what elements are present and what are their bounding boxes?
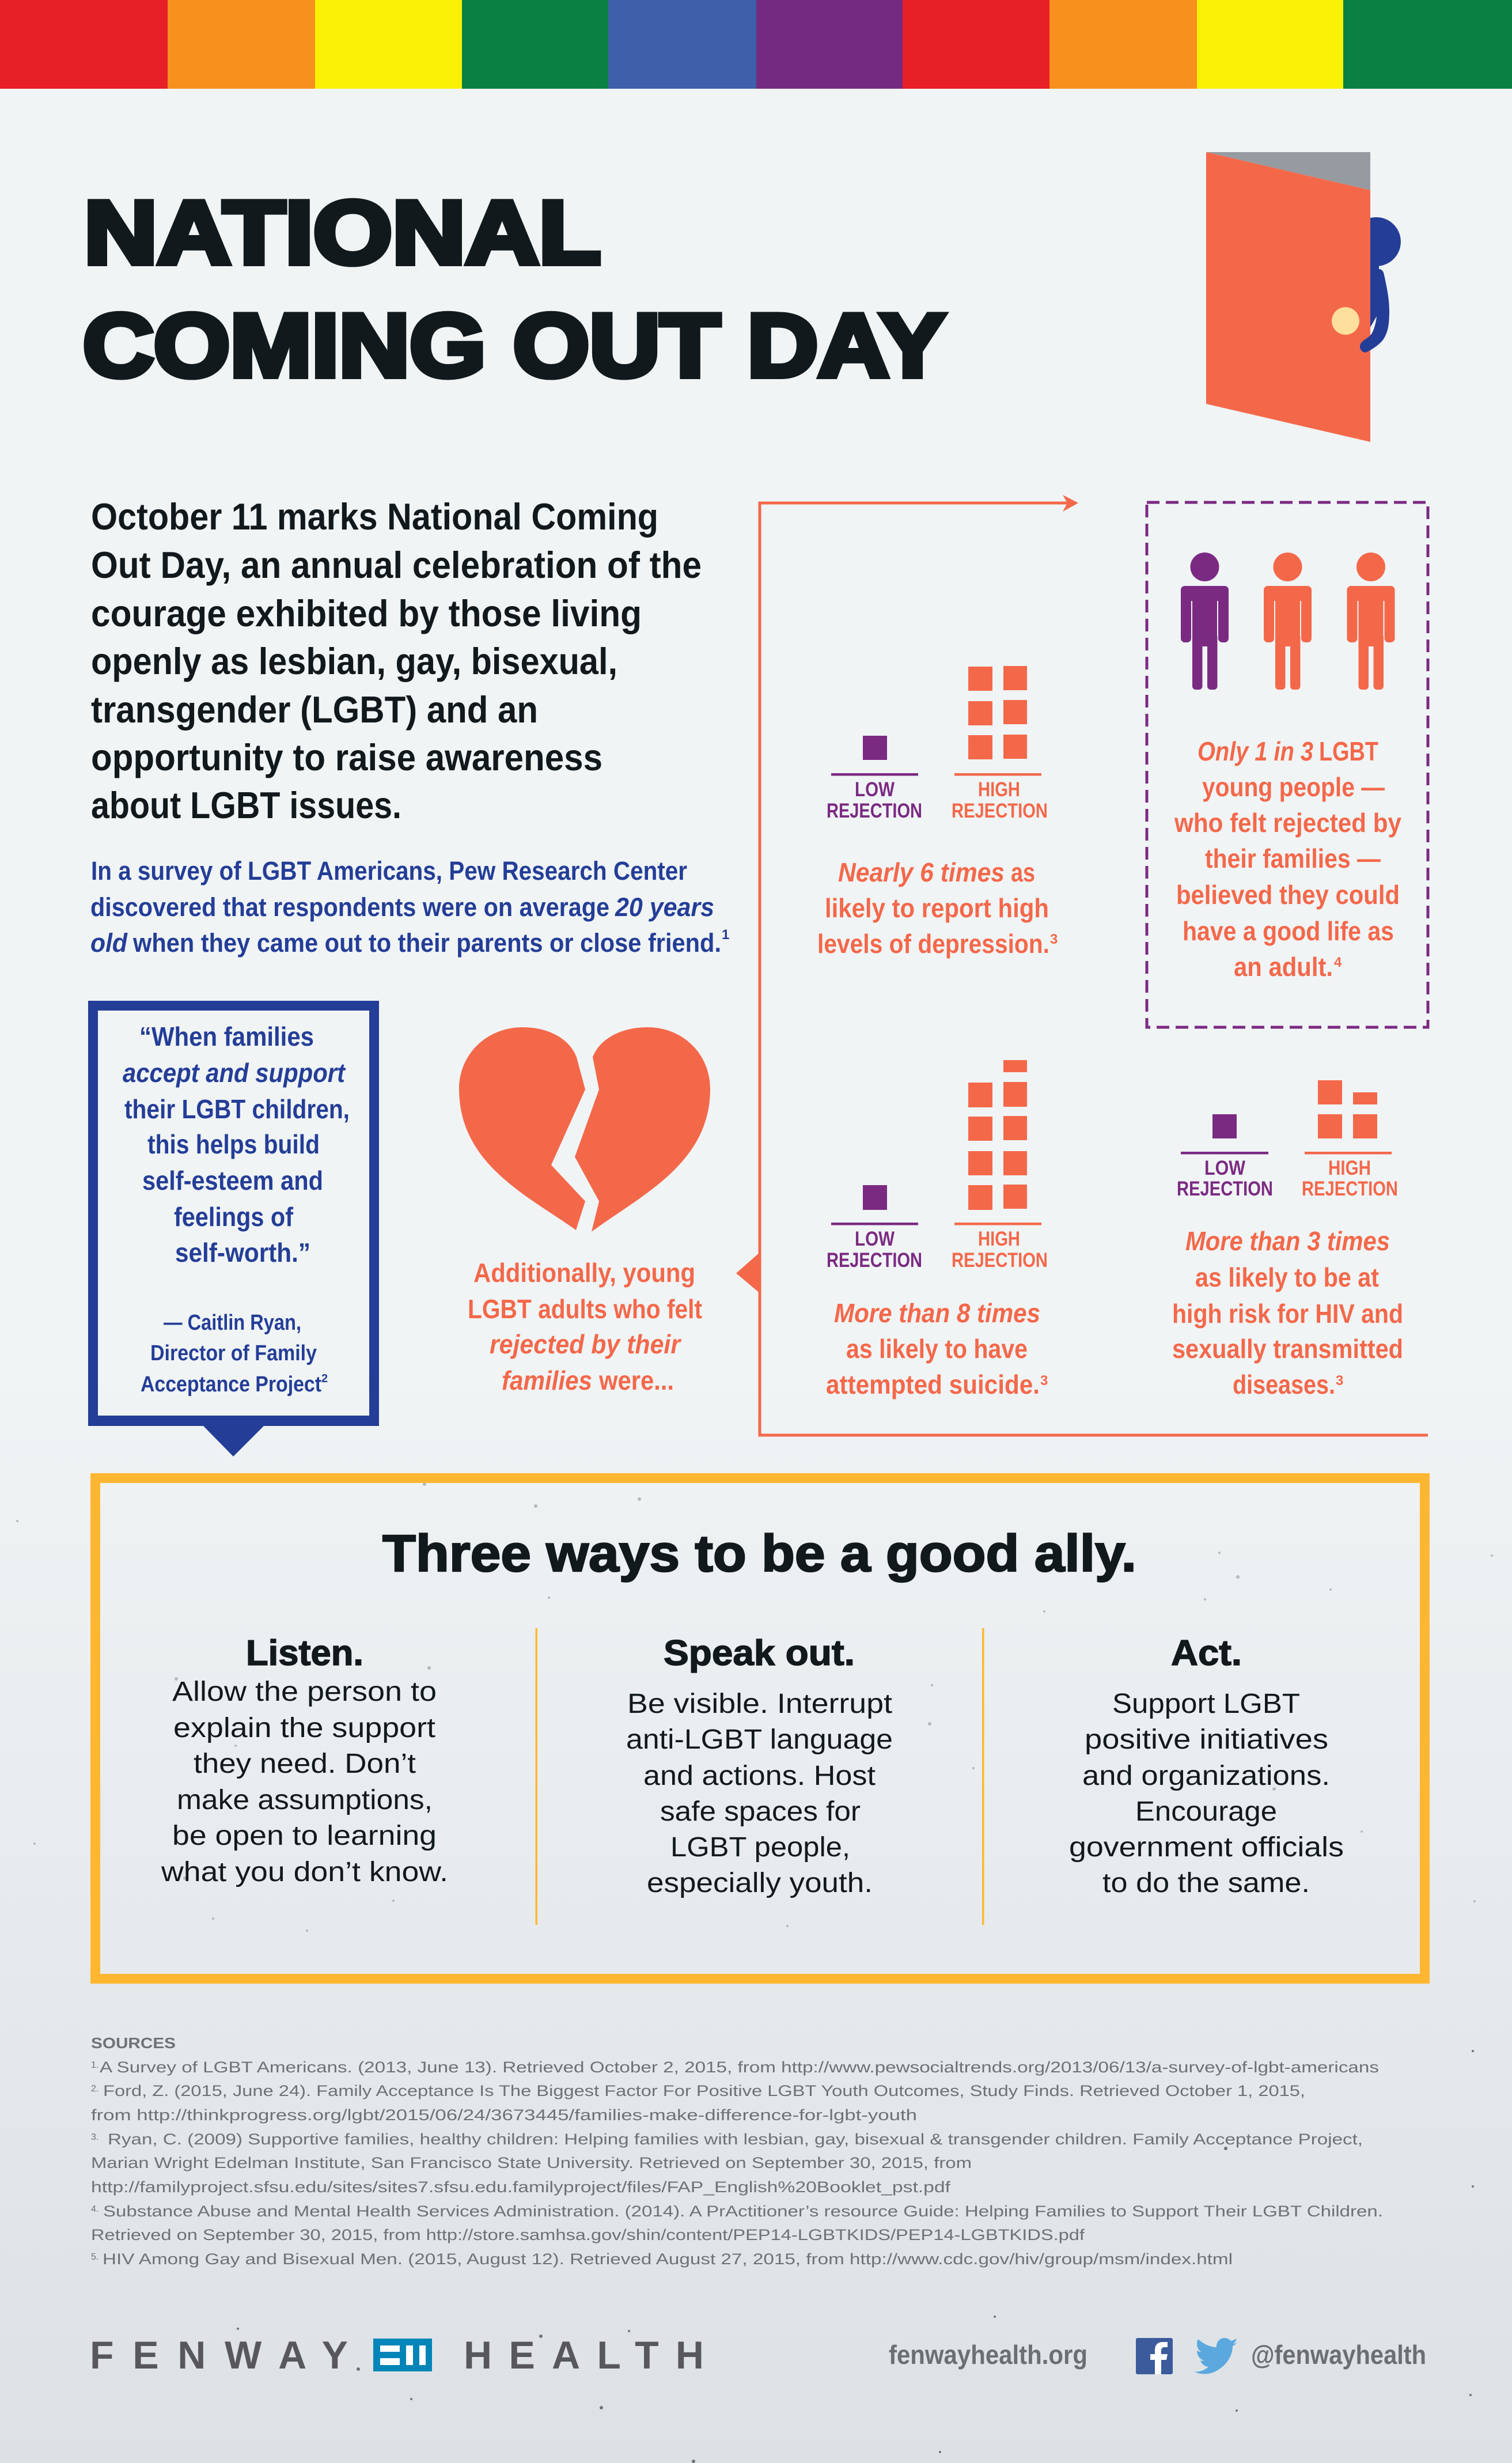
quote text: “When families: [139, 1021, 314, 1051]
quote attribution: — Caitlin Ryan,: [164, 1311, 301, 1335]
low rejection bar: REJECTION: [827, 1249, 922, 1272]
survey text block: old: [90, 928, 128, 958]
caption: as likely to have: [846, 1334, 1028, 1364]
text: rejected by their families: families: [502, 1365, 592, 1395]
column: speak out: [626, 1633, 893, 1898]
intro paragraph: openly as lesbian, gay, bisexual,: [91, 640, 617, 682]
caption: sexually transmitted: [1172, 1334, 1403, 1364]
caption: high risk for HIV and: [1172, 1299, 1403, 1329]
logo: Fenway Health: HEALTH: [464, 2333, 704, 2377]
speech bubble frame: [88, 1001, 379, 1456]
icon: person peeking from behind open door: [1206, 152, 1401, 442]
sources list: 3.: [91, 2132, 98, 2142]
column: speak out: Speak out.: [664, 1633, 855, 1673]
quote attribution: [141, 1311, 328, 1397]
text: rejected by their families: LGBT adults who felt: [468, 1294, 702, 1324]
intro paragraph: [91, 495, 702, 826]
caption: 3: [1040, 1373, 1048, 1388]
title: NATIONAL: [84, 183, 601, 282]
column: listen: explain the support: [173, 1713, 435, 1743]
person arm: [1360, 265, 1389, 353]
column: act: [1069, 1633, 1344, 1898]
door knob: [1332, 307, 1359, 335]
sources list: Retrieved on September 30, 2015, from http://store.samhsa.gov/shin/content/PEP14-LGBTKIDS/PEP14-LGBTKIDS.pdf: [91, 2226, 1085, 2243]
icon: broken heart: [459, 1027, 710, 1232]
caption: [817, 857, 1058, 959]
quote text: accept and support: [123, 1058, 346, 1088]
caption: Nearly 6 times: [838, 857, 1005, 887]
caption: LGBT: [1319, 736, 1378, 766]
column: listen: Listen.: [246, 1633, 363, 1673]
quote text: this helps build: [147, 1129, 320, 1159]
sources list: 5.: [91, 2252, 98, 2262]
chart: depression, low vs high rejection: [817, 666, 1058, 959]
survey text block: In a survey of LGBT Americans, Pew Research Center: [91, 856, 687, 886]
intro paragraph: October 11 marks National Coming: [91, 495, 658, 538]
column: speak out: safe spaces for: [660, 1796, 861, 1827]
text: rejected by their families: Additionally, young: [473, 1258, 695, 1288]
sources list: 4.: [91, 2204, 98, 2214]
icon: Facebook: [1136, 2338, 1173, 2374]
quote text: self-esteem and: [142, 1166, 323, 1195]
caption: who felt rejected by: [1174, 808, 1401, 838]
logo: Fenway Health: FENWAY: [90, 2333, 348, 2377]
column: speak out: and actions. Host: [643, 1761, 876, 1791]
logo: Fenway Health: [90, 2333, 704, 2377]
quote text: feelings of: [174, 1202, 294, 1232]
survey text block: [90, 856, 729, 958]
text: rejected by their families: rejected by their: [490, 1329, 681, 1359]
sources list: [91, 2059, 1383, 2268]
icon: orange person: [1347, 553, 1395, 690]
high rejection bars: [952, 666, 1048, 822]
column: listen: make assumptions,: [177, 1785, 433, 1815]
caption: diseases.: [1233, 1369, 1335, 1399]
sources list: 2.: [91, 2084, 98, 2094]
survey text block: 1: [722, 927, 729, 943]
caption: as likely to be at: [1195, 1262, 1379, 1292]
caption: young people —: [1202, 772, 1385, 802]
text: rejected by their families: were...: [598, 1365, 674, 1395]
low rejection bar: [827, 736, 922, 822]
quote attribution: Acceptance Project: [141, 1372, 321, 1397]
survey text block: 20 years: [615, 892, 714, 922]
high rejection bars: HIGH: [1328, 1157, 1371, 1179]
column: act: to do the same.: [1102, 1868, 1310, 1898]
door frame: [1206, 152, 1370, 190]
column: speak out: anti-LGBT language: [626, 1724, 893, 1755]
column: act: government officials: [1069, 1832, 1344, 1863]
column: speak out: LGBT people,: [670, 1832, 850, 1863]
sources heading: SOURCES: [91, 2034, 176, 2052]
caption: as: [1011, 857, 1035, 887]
low rejection bar: REJECTION: [827, 800, 922, 822]
caption: believed they could: [1176, 880, 1400, 910]
panel: quote box: [88, 1001, 379, 1456]
intro paragraph: courage exhibited by those living: [91, 592, 642, 634]
quote text: [123, 1021, 350, 1268]
text: rejected by their families: [468, 1258, 702, 1395]
caption: More than 3 times: [1185, 1226, 1390, 1256]
sources list: Marian Wright Edelman Institute, San Francisco State University. Retrieved on September 30, 2015, from: [91, 2154, 972, 2171]
column: listen: they need. Don’t: [194, 1749, 416, 1779]
arrow: bracket frame with pointers: [736, 495, 1428, 1435]
low rejection bar: [1177, 1114, 1273, 1200]
survey text block: when they came out to their parents or close friend.: [132, 928, 721, 958]
column: act: positive initiatives: [1085, 1724, 1328, 1755]
column: speak out: Be visible. Interrupt: [627, 1689, 892, 1719]
low rejection bar: LOW: [855, 1228, 895, 1250]
high rejection bars: REJECTION: [1302, 1178, 1398, 1200]
dashed border: [1147, 502, 1428, 1027]
icon: Twitter bird: [1194, 2338, 1238, 2374]
low rejection bar: LOW: [1204, 1157, 1245, 1179]
panel border: [96, 1478, 1425, 1978]
caption: [1174, 736, 1401, 982]
panel: three ways to be a good ally: [96, 1478, 1425, 1978]
door: [1206, 152, 1370, 442]
column: act: Act.: [1171, 1633, 1242, 1673]
logo mark: [373, 2339, 432, 2371]
sources list: Ryan, C. (2009) Supportive families, healthy children: Helping families with lesbian, gay, bisexual & transgender children. Family Acceptance Project,: [108, 2131, 1363, 2148]
rainbow stripe banner: [0, 0, 1512, 89]
panel: one in three dashed box: [1147, 502, 1428, 1027]
person head: [1370, 217, 1401, 266]
caption: their families —: [1205, 843, 1381, 873]
quote attribution: Director of Family: [150, 1341, 317, 1365]
column: listen: Allow the person to: [172, 1677, 437, 1707]
column: act: Support LGBT: [1112, 1689, 1300, 1719]
title: COMING OUT DAY: [83, 296, 945, 395]
column: listen: be open to learning: [172, 1821, 437, 1851]
low rejection bar: [827, 1185, 922, 1272]
intro paragraph: opportunity to raise awareness: [91, 736, 602, 778]
icon: orange person: [1264, 553, 1312, 690]
high rejection bars: HIGH: [978, 778, 1020, 801]
caption: 3: [1336, 1373, 1343, 1388]
column: listen: what you don’t know.: [161, 1857, 448, 1887]
column: speak out: especially youth.: [647, 1868, 873, 1898]
quote text: self-worth.”: [175, 1238, 310, 1268]
quote attribution: 2: [321, 1372, 328, 1385]
high rejection bars: [1302, 1080, 1398, 1200]
high rejection bars: REJECTION: [952, 1249, 1048, 1272]
icon: purple person: [1181, 553, 1229, 690]
caption: have a good life as: [1183, 916, 1394, 946]
sources list: from http://thinkprogress.org/lgbt/2015/06/24/3673445/families-make-difference-for-lgbt-youth: [91, 2106, 917, 2124]
caption: 4: [1334, 955, 1342, 970]
column: act: Encourage: [1135, 1796, 1277, 1827]
caption: More than 8 times: [834, 1298, 1040, 1328]
caption: an adult.: [1234, 952, 1333, 982]
sources list: HIV Among Gay and Bisexual Men. (2015, August 12). Retrieved August 27, 2015, from http://www.cdc.gov/hiv/group/msm/index.html: [103, 2250, 1233, 2268]
quote text: their LGBT children,: [124, 1094, 350, 1124]
sources list: http://familyproject.sfsu.edu/sites/sites7.sfsu.edu.familyproject/files/FAP_English%20Booklet_pst.pdf: [91, 2178, 951, 2196]
social handle: @fenwayhealth: [1251, 2340, 1426, 2370]
column: listen: [161, 1633, 448, 1887]
caption: [1172, 1226, 1403, 1399]
column: act: and organizations.: [1082, 1761, 1330, 1791]
title: [83, 183, 945, 395]
intro paragraph: Out Day, an annual celebration of the: [91, 544, 702, 586]
caption: Only 1 in 3: [1198, 736, 1313, 766]
sources list: A Survey of LGBT Americans. (2013, June 13). Retrieved October 2, 2015, from http://www.pewsocialtrends.org/2013/06/13/a-survey-of-lgbt-americans: [100, 2059, 1379, 2076]
website link: fenwayhealth.org: [889, 2340, 1087, 2370]
survey text block: discovered that respondents were on average: [90, 892, 609, 922]
intro paragraph: transgender (LGBT) and an: [91, 688, 538, 731]
low rejection bar: REJECTION: [1177, 1178, 1273, 1200]
chart: attempted suicide, low vs high rejection: [826, 1060, 1048, 1399]
panel heading: Three ways to be a good ally.: [382, 1525, 1136, 1583]
caption: attempted suicide.: [826, 1369, 1040, 1399]
high rejection bars: HIGH: [978, 1228, 1020, 1250]
sources list: 1.: [91, 2060, 98, 2070]
sources list: Substance Abuse and Mental Health Services Administration. (2014). A PrActitioner’s resource Guide: Helping Families to Support Their LGBT Children.: [103, 2203, 1383, 2220]
chart: HIV risk, low vs high rejection: [1172, 1080, 1403, 1399]
low rejection bar: LOW: [855, 778, 895, 801]
caption: levels of depression.: [817, 929, 1049, 959]
caption: 3: [1050, 932, 1058, 947]
high rejection bars: [952, 1060, 1048, 1272]
high rejection bars: REJECTION: [952, 800, 1048, 822]
caption: [826, 1298, 1048, 1399]
intro paragraph: about LGBT issues.: [91, 784, 401, 826]
sources list: Ford, Z. (2015, June 24). Family Acceptance Is The Biggest Factor For Positive LGBT Youth Outcomes, Study Finds. Retrieved October 1, 2015,: [103, 2082, 1305, 2099]
caption: likely to report high: [825, 893, 1049, 923]
sources: [91, 2034, 1383, 2268]
